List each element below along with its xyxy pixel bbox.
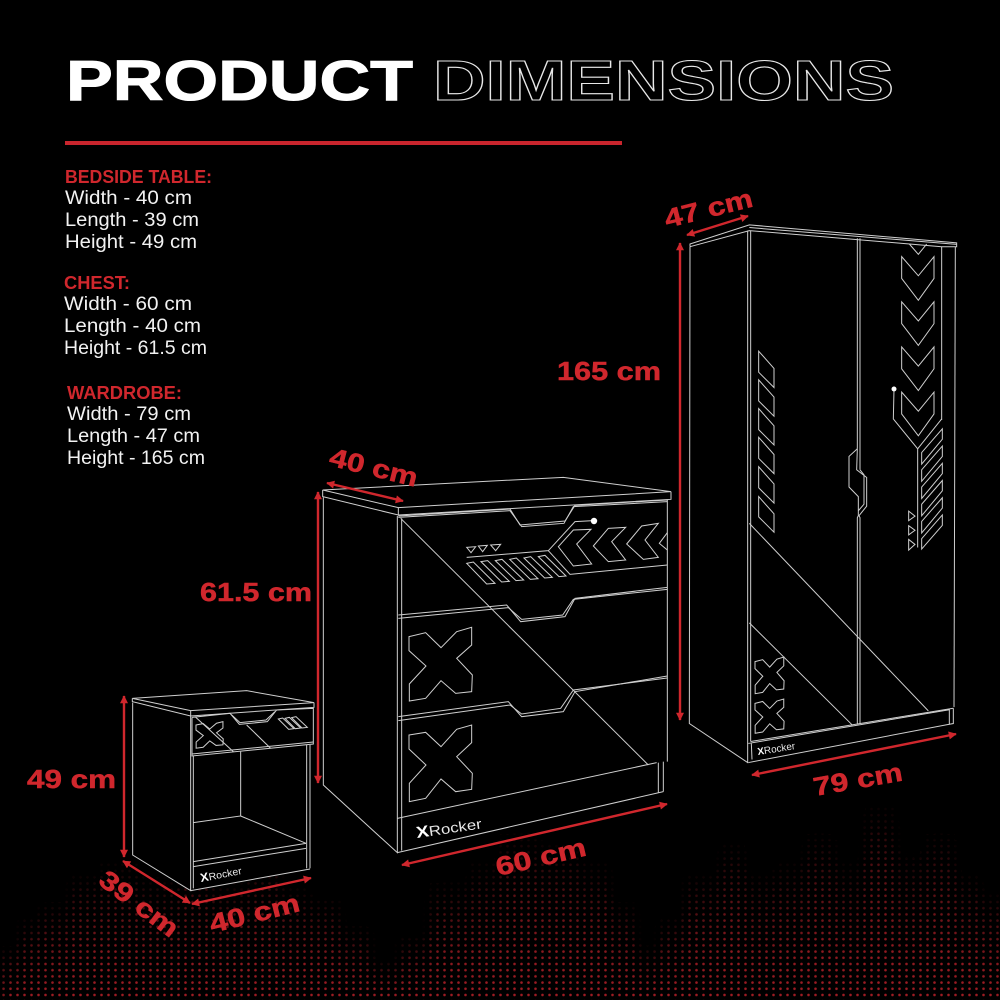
arrow: bedside table height: [123, 696, 125, 857]
label: wardrobe 47 cm: 47 cm: [661, 183, 756, 234]
bedside table logo: XRocker: [199, 863, 243, 885]
label: chest 60 cm: 60 cm: [493, 832, 589, 882]
text block: chest: CHEST:: [64, 273, 130, 293]
text block: wardrobe: [67, 383, 205, 469]
arrow: chest depth: [327, 483, 403, 501]
text block: bedside table: Height - 49 cm: [65, 232, 197, 253]
chest handle dot: [591, 518, 597, 524]
title: PRODUCT: [66, 49, 413, 113]
text block: chest: [64, 273, 207, 359]
wardrobe handle dot: [892, 386, 896, 392]
icon: wardrobe X marks: [755, 657, 784, 733]
text block: wardrobe: WARDROBE:: [67, 383, 182, 403]
text block: chest: Width - 60 cm: [64, 294, 192, 315]
text block: chest: Length - 40 cm: [64, 316, 201, 337]
text block: bedside table: Width - 40 cm: [65, 188, 192, 209]
label: bedside 40 cm: 40 cm: [206, 887, 303, 939]
arrow: bedside table depth: [123, 861, 190, 903]
wardrobe logo: XRocker: [757, 741, 797, 758]
arrow: wardrobe width: [752, 734, 956, 775]
label: 61.5 cm: 61.5 cm: [200, 577, 312, 607]
arrow: chest height: [317, 492, 319, 783]
title: [66, 49, 894, 113]
label: 165 cm: 165 cm: [557, 356, 661, 386]
text block: wardrobe: Length - 47 cm: [67, 426, 200, 447]
text block: chest: Height - 61.5 cm: [64, 338, 207, 359]
chest logo: XRocker: [415, 815, 483, 842]
chest of drawers line drawing: [323, 477, 671, 853]
text block: bedside table: BEDSIDE TABLE:: [65, 167, 212, 187]
label: 49 cm: 49 cm: [27, 764, 116, 794]
arrow: wardrobe height: [679, 243, 681, 720]
label: bedside 39 cm: 39 cm: [93, 864, 185, 943]
label: wardrobe 79 cm: 79 cm: [811, 757, 905, 802]
title: DIMENSIONS: [433, 49, 894, 113]
label: chest 40 cm: 40 cm: [327, 442, 421, 493]
text block: wardrobe: Width - 79 cm: [67, 404, 191, 425]
title underline: [65, 141, 622, 145]
wardrobe line drawing: [689, 225, 957, 763]
text block: bedside table: Length - 39 cm: [65, 210, 199, 231]
arrow: wardrobe depth: [687, 216, 748, 235]
bedside table line drawing: [132, 691, 314, 891]
arrow: chest width: [402, 804, 667, 865]
text block: wardrobe: Height - 165 cm: [67, 448, 205, 469]
arrow: bedside table width: [192, 878, 311, 904]
text block: bedside table: [65, 167, 212, 253]
decorative red dot field: [2, 808, 999, 1000]
